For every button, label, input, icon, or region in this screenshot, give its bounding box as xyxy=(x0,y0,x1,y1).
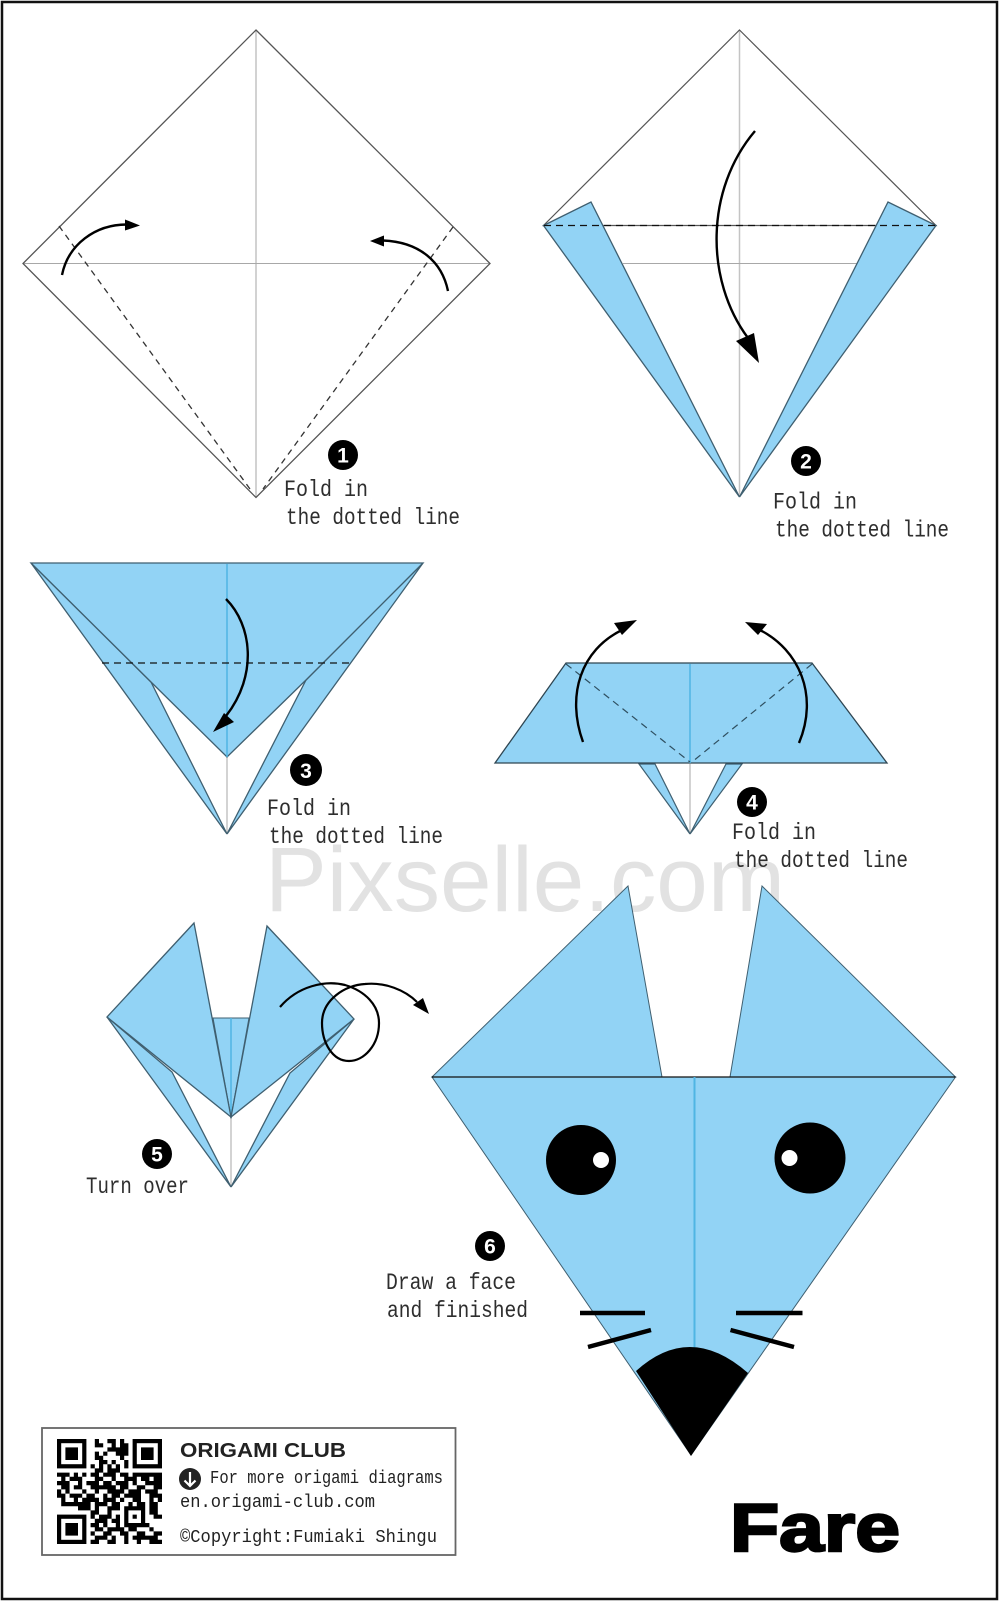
title: Fare: Fare xyxy=(730,1490,900,1566)
step 3 number badge: 3 xyxy=(300,760,312,783)
step 4 number badge: 4 xyxy=(746,792,758,814)
QR code xyxy=(57,1441,162,1542)
step 4 caption xyxy=(732,820,908,874)
copyright: ©Copyright:Fumiaki Shingu xyxy=(180,1528,437,1548)
step 2 kite paper xyxy=(544,30,936,497)
step 1 caption: the dotted line xyxy=(286,505,460,531)
step 3 panel xyxy=(31,563,443,850)
right whiskers xyxy=(730,1313,802,1347)
mouse left ear xyxy=(432,886,662,1077)
step 3 caption xyxy=(267,796,443,850)
step 3 folded paper xyxy=(31,563,423,834)
step 5 panel xyxy=(86,923,429,1200)
step 1 caption: Fold in xyxy=(284,477,368,503)
step 5 folded paper xyxy=(107,923,354,1187)
step 1 right arrow xyxy=(370,236,448,291)
step 4 caption: the dotted line xyxy=(734,848,908,874)
step 5 number badge xyxy=(142,1139,172,1169)
origami club info box xyxy=(42,1428,456,1555)
step 2 caption: Fold in xyxy=(773,490,857,516)
mouse right ear xyxy=(730,886,956,1077)
step 6 number badge xyxy=(475,1231,505,1261)
icon: download arrow xyxy=(179,1468,201,1490)
website address: en.origami-club.com xyxy=(180,1493,375,1513)
step 6 caption xyxy=(386,1270,528,1324)
step 3 number badge xyxy=(290,754,322,786)
step 2 caption xyxy=(773,490,949,544)
step 4 left arrow xyxy=(576,620,637,742)
left whiskers xyxy=(580,1313,651,1347)
step 3 caption: Fold in xyxy=(267,796,351,822)
more diagrams text: For more origami diagrams xyxy=(210,1469,443,1489)
step 4 panel xyxy=(495,620,908,874)
step 4 caption: Fold in xyxy=(732,820,816,846)
step 2 number badge xyxy=(791,446,821,476)
step 6 panel xyxy=(386,886,956,1456)
step 3 down arrow xyxy=(213,599,248,732)
step 5 turn-over loop arrow xyxy=(280,983,429,1061)
step 6 caption: and finished xyxy=(387,1298,528,1324)
step 1 panel xyxy=(23,30,490,531)
step 5 caption: Turn over xyxy=(86,1174,189,1200)
step 6 number badge: 6 xyxy=(484,1236,496,1258)
right eye xyxy=(774,1122,846,1194)
nose xyxy=(636,1347,748,1456)
step 1 number badge xyxy=(328,440,358,470)
step 5 number badge: 5 xyxy=(151,1144,163,1166)
step 1 caption xyxy=(284,477,460,531)
step 1 diamond paper xyxy=(23,30,490,498)
step 2 down arrow xyxy=(717,131,759,363)
step 4 number badge xyxy=(737,787,767,817)
step 6 caption: Draw a face xyxy=(386,1270,516,1296)
step 2 caption: the dotted line xyxy=(775,518,949,544)
mouse face xyxy=(432,1077,956,1455)
step 1 left arrow xyxy=(62,220,140,275)
watermark: Pixselle.com xyxy=(265,829,785,931)
step 4 folded paper xyxy=(495,663,887,834)
step 3 caption: the dotted line xyxy=(269,824,443,850)
step 2 number badge: 2 xyxy=(800,450,812,474)
step 2 panel xyxy=(544,30,949,544)
step 4 right arrow xyxy=(745,622,807,743)
left eye xyxy=(546,1125,616,1195)
step 1 number badge: 1 xyxy=(337,444,349,468)
club name: ORIGAMI CLUB xyxy=(180,1440,346,1462)
